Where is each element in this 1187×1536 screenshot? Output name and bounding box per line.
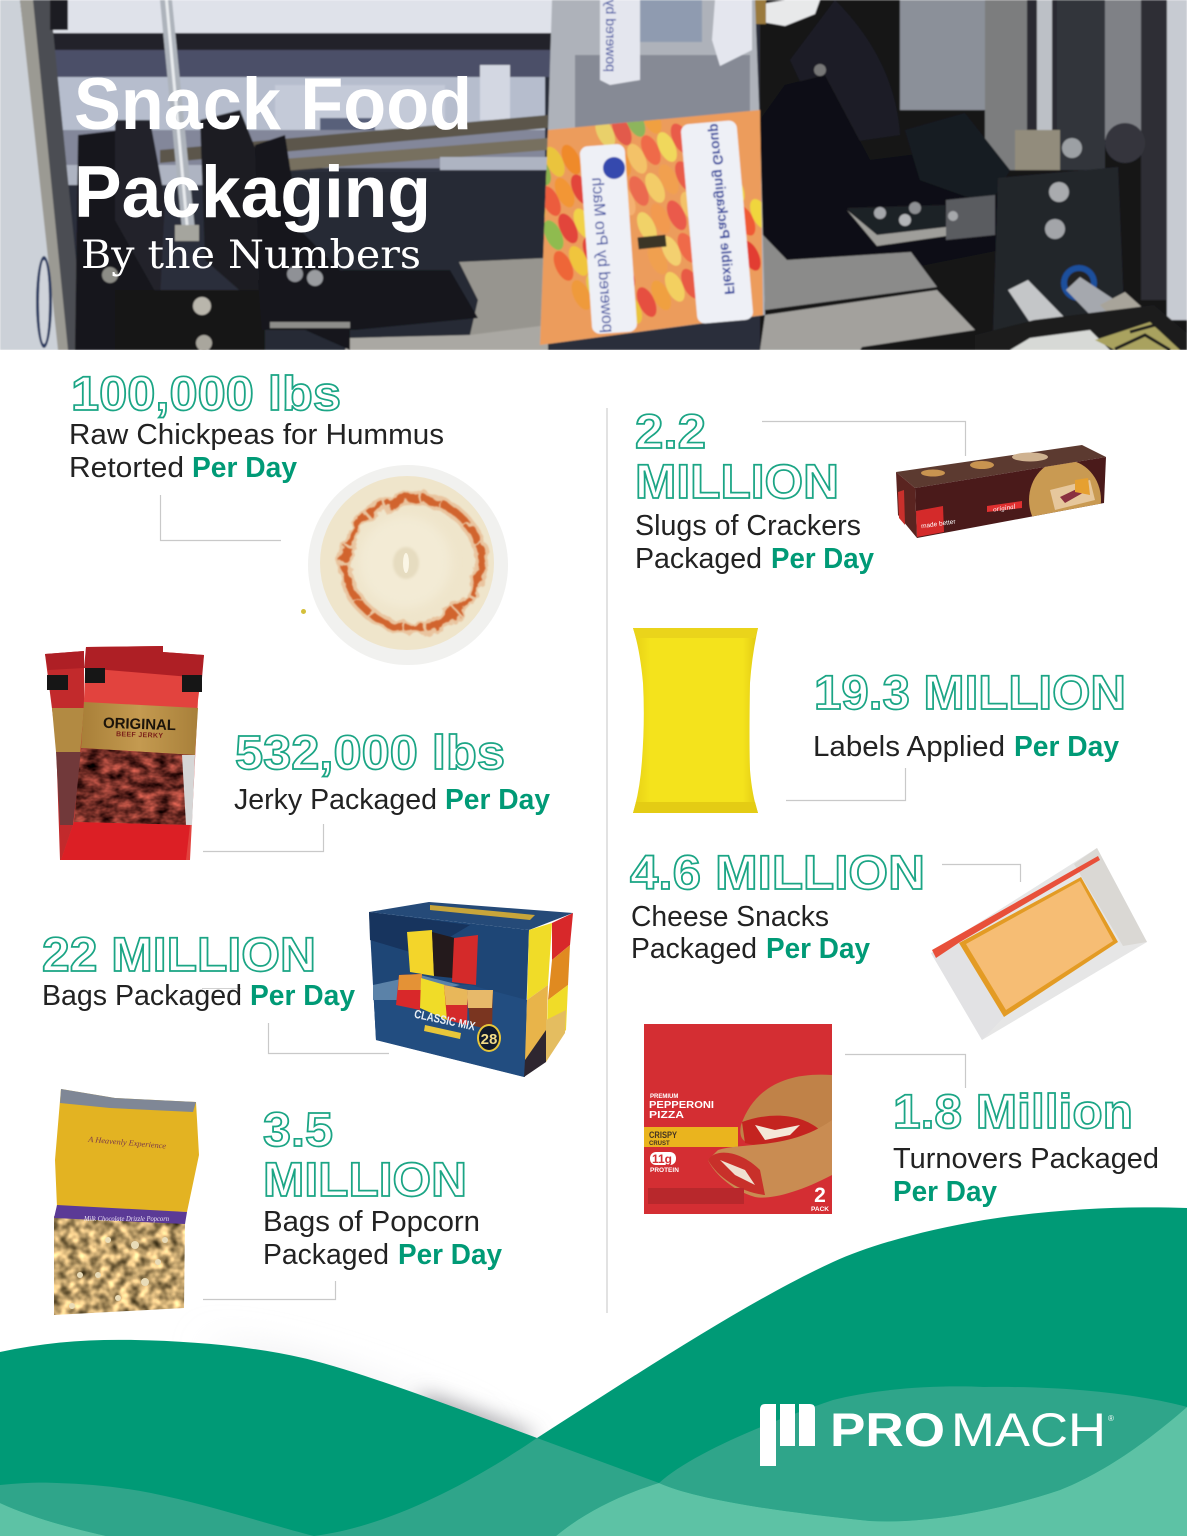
protein badge (650, 1152, 679, 1174)
connector (942, 864, 1020, 882)
caption: Turnovers Packaged (893, 1143, 1159, 1175)
heading line 2: MILLION (635, 456, 839, 509)
label text: top of bag: powered by (603, 0, 619, 72)
per day: Per Day (771, 543, 874, 575)
connector (203, 824, 324, 852)
per day: Per Day (1014, 731, 1119, 763)
heading line 1: 2.2 (635, 406, 706, 459)
logo wordmark: PRO: PRO (830, 1403, 945, 1456)
per day: Per Day (893, 1176, 997, 1208)
icon: hummus tub (308, 465, 508, 665)
stat: 100,000 lbs chickpeas (69, 368, 444, 484)
icon: cracker box (896, 445, 1106, 540)
stat: 532,000 lbs jerky (234, 727, 550, 816)
hero photo: packaging machine (0, 0, 1187, 351)
product text: Pizza: PIZZA (649, 1110, 684, 1121)
product text: Beef Jerky: BEEF JERKY (116, 731, 163, 740)
product text: Premium: PREMIUM (650, 1094, 678, 1100)
stat: 3.5 million popcorn (263, 1104, 502, 1271)
connector (203, 1281, 336, 1300)
title line: Packaging: Packaging (74, 152, 431, 233)
stat: 22 million bags (42, 929, 355, 1012)
icon: cheese snack pack (931, 848, 1147, 1040)
caption line 2: Packaged (263, 1239, 389, 1271)
connector (786, 768, 906, 800)
icon: popcorn bag (54, 1089, 199, 1315)
per day: Per Day (192, 452, 297, 484)
heading line 1: 3.5 (263, 1104, 333, 1157)
badge: 28 (477, 1024, 501, 1052)
subtitle: By the Numbers (81, 233, 421, 278)
pack count (811, 1184, 829, 1213)
footer wave background (0, 1207, 1187, 1536)
heading: 19.3 MILLION (814, 667, 1126, 720)
registered mark: ® (1108, 1414, 1114, 1423)
product text: Crust: CRUST (649, 1141, 670, 1147)
caption line 1: Slugs of Crackers (635, 510, 861, 542)
product text: A Heavenly Experience: A Heavenly Experience (87, 1135, 167, 1151)
stat: 1.8 million turnovers (893, 1086, 1159, 1208)
per day: Per Day (445, 784, 550, 816)
product text: Milk Chocolate Drizzle Popcorn: Milk Chocolate Drizzle Popcorn (83, 1214, 169, 1223)
caption: Labels Applied (813, 731, 1005, 763)
heading: 1.8 Million (893, 1086, 1133, 1139)
label text: powered by Pro Mach: powered by Pro Mach (588, 177, 616, 333)
stat: 19.3 million labels (813, 667, 1126, 763)
product text: Crispy: CRISPY (649, 1130, 677, 1140)
icon: pepperoni pizza turnover box (644, 1024, 832, 1214)
caption line 2: Packaged (635, 543, 762, 575)
stat: 2.2 million crackers (635, 406, 874, 575)
heading: 532,000 lbs (235, 727, 505, 780)
protein badge: 11g (652, 1152, 672, 1166)
stray connector fragment behind text (202, 988, 241, 990)
heading: 22 MILLION (42, 929, 316, 982)
per day: Per Day (398, 1239, 502, 1271)
logo wordmark: MACH: MACH (951, 1403, 1106, 1456)
caption line 1: Bags of Popcorn (263, 1206, 480, 1238)
hero title (74, 64, 472, 278)
product text: Party Size (424, 1025, 461, 1039)
stat: 4.6 million cheese snacks (630, 847, 925, 965)
logo: ProMach (760, 1403, 1114, 1466)
caption: Jerky Packaged (234, 784, 437, 816)
per day: Per Day (250, 980, 355, 1012)
icon: chip variety box (369, 902, 573, 1077)
icon: yellow chip bag (633, 628, 758, 813)
connector (762, 422, 966, 456)
badge: 28: 28 (481, 1031, 497, 1048)
caption line 1: Raw Chickpeas for Hummus (69, 419, 444, 451)
title line: Snack Food: Snack Food (74, 64, 472, 145)
protein badge: PROTEIN (650, 1167, 679, 1174)
label text: Flexible Packaging Group: Flexible Packaging Group (707, 123, 738, 295)
caption line 1: Cheese Snacks (631, 901, 829, 933)
pack count: PACK (811, 1206, 829, 1213)
heading line 2: MILLION (263, 1154, 467, 1207)
pack count: 2 (814, 1184, 826, 1207)
icon: jerky bags (45, 646, 204, 860)
caption: Bags Packaged (42, 980, 242, 1012)
heading: 4.6 MILLION (630, 847, 925, 900)
logo mark (760, 1404, 815, 1466)
connector (845, 1054, 966, 1088)
connector (268, 1023, 389, 1054)
caption line 2: Retorted (69, 452, 184, 484)
caption line 2: Packaged (631, 933, 757, 965)
heading: 100,000 lbs (71, 368, 341, 421)
product text: made better: made better (921, 518, 957, 530)
center divider (606, 408, 608, 1313)
product text: Classic Mix: CLASSIC MIX (413, 1007, 477, 1033)
product text: original: original (993, 503, 1016, 514)
small dot (301, 609, 306, 614)
product text: Pepperoni: PEPPERONI (649, 1100, 714, 1111)
connector (160, 495, 281, 540)
product text: Original: ORIGINAL (103, 715, 176, 734)
per day: Per Day (766, 933, 870, 965)
